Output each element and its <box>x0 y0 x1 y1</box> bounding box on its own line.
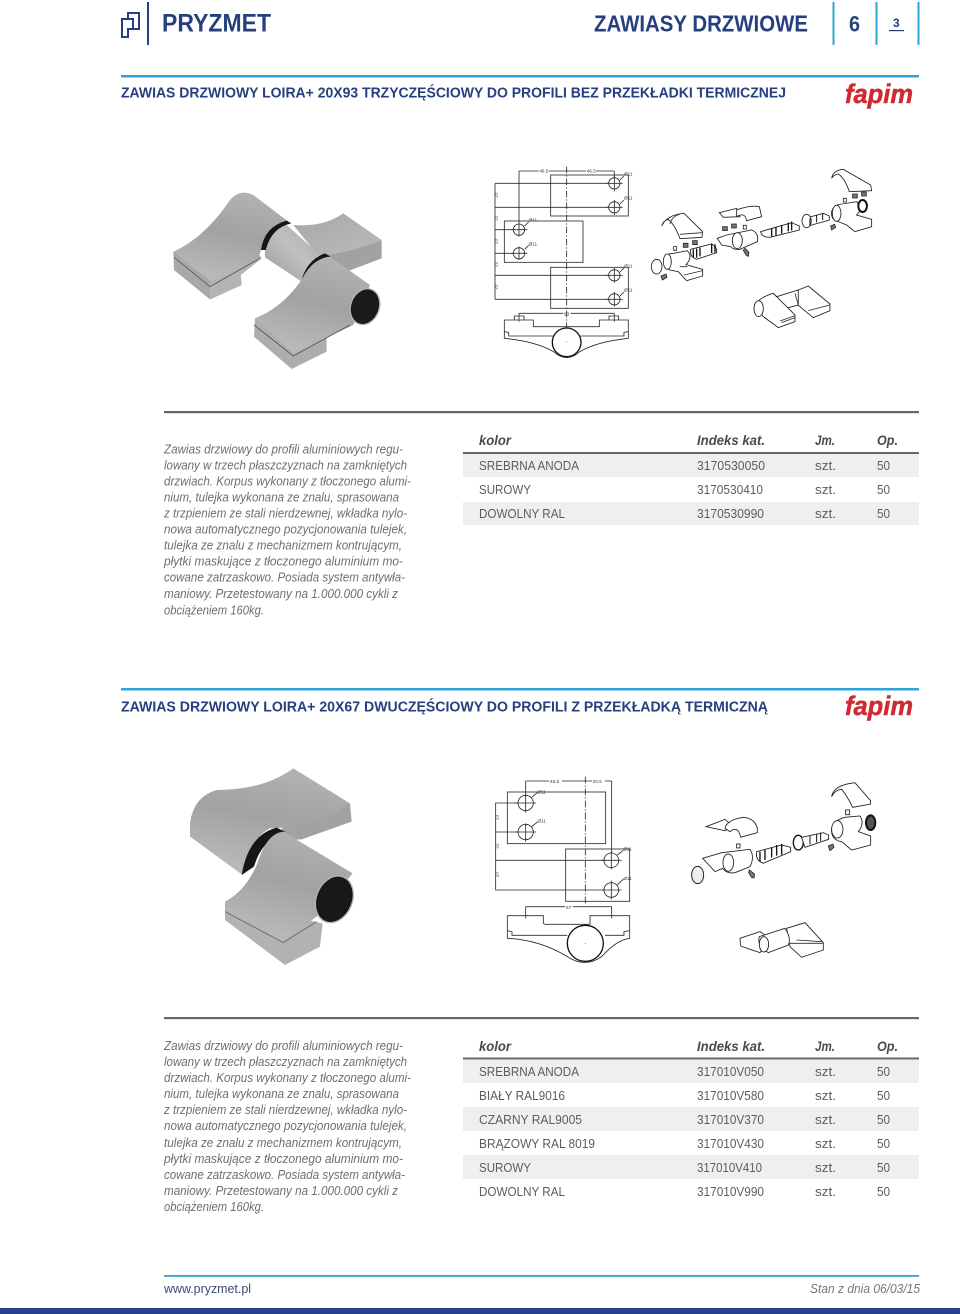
table: section 2: szt. <box>815 1113 836 1127</box>
dimension labels <box>493 169 633 316</box>
photo: two-part hinge <box>190 768 360 965</box>
table: section 2: Indeks kat. <box>697 1038 765 1054</box>
footer: www.pryzmet.pl <box>163 1281 251 1296</box>
dimension labels: 46.5 <box>587 169 596 174</box>
dimension labels: 23 <box>495 872 500 877</box>
rule: section 2 <box>164 1017 919 1019</box>
brand name PRYZMET <box>147 2 271 45</box>
table: section 1: Indeks kat. <box>697 432 765 448</box>
description: section 2: obciążeniem 160kg. <box>164 1200 264 1214</box>
description: section 1 <box>163 442 411 618</box>
dimension labels: Ø11 <box>623 876 632 881</box>
logo: fapim: fapim <box>845 79 913 109</box>
section 1 heading: ZAWIAS DRZWIOWY LOIRA+ 20X93 TRZYCZĘŚCIOWY DO PROFILI BEZ PRZEKŁADKI TERMICZNEJ <box>121 84 786 102</box>
icon: brand mark <box>122 13 139 37</box>
dimension labels: Ø11 <box>529 217 538 222</box>
technical drawing: dimensions 20x67 <box>495 777 632 962</box>
table: section 1: SREBRNA ANODA <box>479 459 580 473</box>
table: section 2: szt. <box>815 1065 836 1079</box>
dimension labels: 23 <box>493 238 498 244</box>
description: section 1: lowany w trzech płaszczyznach na zamkniętych <box>164 458 407 472</box>
table: section 1: 50 <box>877 507 890 521</box>
description: section 1: płytki maskujące z tłoczonego aluminium mo- <box>163 554 403 568</box>
table: section 1: SUROWY <box>479 483 532 497</box>
description: section 1: drzwiach. Korpus wykonany z tłoczonego alumi- <box>164 474 411 488</box>
table: section 2: 317010V990 <box>697 1185 764 1199</box>
table: section 1: 50 <box>877 459 890 473</box>
table: section 2: szt. <box>815 1161 836 1175</box>
description: section 2 <box>163 1039 411 1214</box>
description: section 2: nowa automatycznego pozycjonowania tulejek, <box>164 1119 407 1133</box>
table: section 1: 3170530050 <box>697 459 765 473</box>
chapter number: 6 <box>849 12 860 36</box>
table: section 2: Op. <box>877 1038 898 1054</box>
table: section 2: szt. <box>815 1089 836 1103</box>
table: section 2: 317010V410 <box>697 1161 762 1175</box>
description: section 1: z trzpieniem ze stali nierdzewnej, wkładka nylo- <box>163 506 407 520</box>
dimension labels: 22 <box>493 261 498 267</box>
table: section 1 <box>463 432 919 525</box>
table: section 1: szt. <box>815 459 836 473</box>
description: section 2: z trzpieniem ze stali nierdzewnej, wkładka nylo- <box>163 1103 407 1117</box>
dimension labels: 46.5 <box>550 779 559 784</box>
brand name PRYZMET: PRYZMET <box>162 10 271 38</box>
assembled view: two-part hinge <box>740 923 823 957</box>
footer: Stan z dnia 06/03/15 <box>810 1282 920 1296</box>
dimension labels: Ø11 <box>624 263 633 268</box>
technical drawing: dimensions 20x93 <box>493 167 633 358</box>
dimension labels: Ø11 <box>537 789 546 794</box>
exploded view: three-part hinge <box>651 169 872 281</box>
table: section 2: DOWOLNY RAL <box>479 1185 565 1199</box>
table: section 2: CZARNY RAL9005 <box>479 1113 582 1127</box>
table: section 1: szt. <box>815 483 836 497</box>
description: section 2: cowane zatrzaskowo. Posiada system antywła- <box>164 1168 405 1182</box>
dimension labels: Ø11 <box>624 287 633 292</box>
table: section 2: 50 <box>877 1065 890 1079</box>
dimension labels: 22 <box>493 215 498 221</box>
description: section 1: cowane zatrzaskowo. Posiada system antywła- <box>164 570 405 584</box>
footer <box>0 1275 960 1314</box>
description: section 1: tulejka ze znalu z mechanizmem kontrującym, <box>164 538 402 552</box>
page number: 3 <box>893 16 900 30</box>
logo: fapim: fapim <box>845 691 913 721</box>
photo: three-part hinge <box>173 193 385 369</box>
table: section 2: BRĄZOWY RAL 8019 <box>479 1137 595 1151</box>
description: section 2: maniowy. Przetestowany na 1.000.000 cykli z <box>164 1184 399 1198</box>
dimension labels <box>495 779 632 910</box>
table: section 1: kolor <box>479 432 512 448</box>
table: section 2 <box>463 1038 919 1199</box>
table: section 2: 50 <box>877 1089 890 1103</box>
table: section 2: SUROWY <box>479 1161 532 1175</box>
page number <box>889 16 904 31</box>
description: section 1: maniowy. Przetestowany na 1.000.000 cykli z <box>164 587 399 601</box>
table: section 1: 3170530410 <box>697 483 763 497</box>
description: section 2: lowany w trzech płaszczyznach na zamkniętych <box>164 1055 407 1069</box>
table: section 1: 50 <box>877 483 890 497</box>
description: section 1: obciążeniem 160kg. <box>164 604 264 618</box>
description: section 2: płytki maskujące z tłoczonego aluminium mo- <box>163 1152 403 1166</box>
table: section 2: Jm. <box>815 1038 835 1054</box>
section 2 heading: ZAWIAS DRZWIOWY LOIRA+ 20X67 DWUCZĘŚCIOWY DO PROFILI Z PRZEKŁADKĄ TERMICZNĄ <box>121 698 769 716</box>
table: section 1: 3170530990 <box>697 507 764 521</box>
table: section 1: DOWOLNY RAL <box>479 507 565 521</box>
table: section 2: szt. <box>815 1185 836 1199</box>
dimension labels: Ø11 <box>529 241 538 246</box>
description: section 2: nium, tulejka wykonana ze znalu, sprasowana <box>164 1087 399 1101</box>
description: section 2: tulejka ze znalu z mechanizmem kontrującym, <box>164 1136 402 1150</box>
dimension labels: 23 <box>493 284 498 290</box>
table: section 2: BIAŁY RAL9016 <box>479 1089 565 1103</box>
dimension labels: 67 <box>566 905 572 910</box>
exploded view: two-part hinge <box>692 783 875 884</box>
table: section 1: szt. <box>815 507 836 521</box>
dimension labels: 22 <box>495 843 500 849</box>
description: section 2: drzwiach. Korpus wykonany z tłoczonego alumi- <box>164 1071 411 1085</box>
chapter number <box>832 2 920 45</box>
dimension labels: 23 <box>493 192 498 198</box>
table: section 1: Jm. <box>815 432 835 448</box>
table: section 2: 317010V580 <box>697 1089 764 1103</box>
description: section 2: Zawias drzwiowy do profili aluminiowych regu- <box>163 1039 403 1053</box>
table: section 2: 317010V050 <box>697 1065 764 1079</box>
dimension labels: Ø11 <box>624 195 633 200</box>
description: section 1: Zawias drzwiowy do profili aluminiowych regu- <box>163 442 403 456</box>
table: section 2: 50 <box>877 1137 890 1151</box>
table: section 2: SREBRNA ANODA <box>479 1065 580 1079</box>
table: section 2: 50 <box>877 1113 890 1127</box>
dimension labels: Ø11 <box>624 171 633 176</box>
table: section 2: 50 <box>877 1161 890 1175</box>
dimension labels: 46.5 <box>539 169 549 174</box>
description: section 1: nowa automatycznego pozycjonowania tulejek, <box>164 522 407 536</box>
assembled view: three-part hinge <box>754 286 830 328</box>
dimension labels: 93 <box>564 311 570 316</box>
dimension labels: Ø11 <box>623 847 632 852</box>
table: section 2: 317010V370 <box>697 1113 764 1127</box>
table: section 2: 317010V430 <box>697 1137 764 1151</box>
page header <box>122 2 920 45</box>
dimension labels: 23 <box>495 814 500 820</box>
table: section 2: kolor <box>479 1038 512 1054</box>
dimension labels: Ø11 <box>537 819 546 824</box>
section title: ZAWIASY DRZWIOWE <box>594 10 808 36</box>
table: section 2: 50 <box>877 1185 890 1199</box>
dimension labels: 20.5 <box>593 779 602 784</box>
table: section 1: Op. <box>877 432 898 448</box>
description: section 1: nium, tulejka wykonana ze znalu, sprasowana <box>164 490 399 504</box>
table: section 2: szt. <box>815 1137 836 1151</box>
rule: section 1 <box>164 411 919 413</box>
